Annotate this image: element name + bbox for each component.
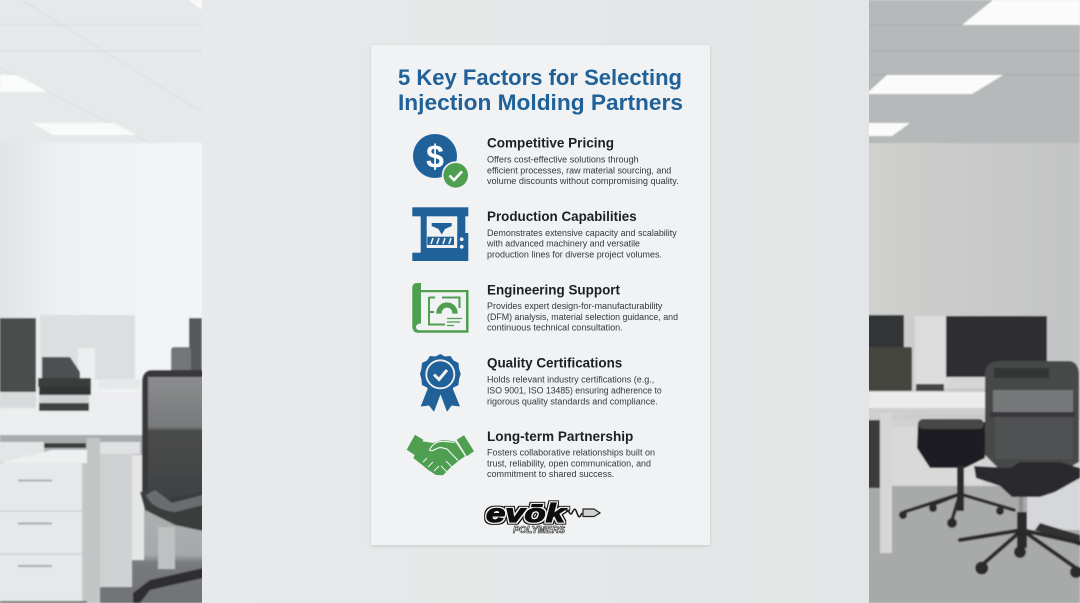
text: long-term partnership description: trust, reliability, open communication, and	[487, 458, 651, 469]
text: quality certifications description: ISO 9001, ISO 13485) ensuring adherence to	[487, 385, 662, 396]
logo: evok polymers: evōk	[486, 498, 567, 528]
heading: production capabilities: Production Capabilities	[487, 209, 637, 224]
left office background	[0, 0, 203, 603]
text: competitive pricing description: efficient processes, raw material sourcing, and	[487, 165, 671, 176]
icon: dollar with check	[413, 134, 470, 189]
text: production capabilities description: Demonstrates extensive capacity and scalability	[487, 228, 677, 239]
item: competitive pricing	[413, 134, 679, 189]
text: production capabilities description	[486, 228, 677, 260]
item: long-term partnership	[407, 429, 655, 480]
icon: blueprint	[412, 283, 468, 333]
text: long-term partnership description: Fosters collaborative relationships built on	[487, 448, 655, 459]
text: competitive pricing description: Offers cost-effective solutions through	[487, 155, 639, 166]
icon: injection press	[412, 207, 468, 261]
text: production capabilities description: with advanced machinery and versatile	[486, 239, 640, 250]
text: long-term partnership description: commitment to shared success.	[487, 469, 614, 480]
title: 5 Key Factors for Selecting	[398, 65, 682, 90]
text: quality certifications description: Holds relevant industry certifications (e.g.,	[487, 375, 654, 386]
text: engineering support description: (DFM) analysis, material selection guidance, and	[487, 312, 678, 323]
text: engineering support description	[487, 301, 678, 334]
text: production capabilities description: production lines for diverse project volumes.	[487, 249, 662, 260]
text: engineering support description: continuous technical consultation.	[487, 323, 623, 334]
heading: long-term partnership: Long-term Partnership	[487, 429, 633, 444]
icon: handshake	[407, 435, 474, 475]
text: quality certifications description: rigorous quality standards and compliance.	[487, 396, 658, 407]
icon: dollar with check: $	[426, 138, 444, 174]
right office background	[866, 0, 1080, 603]
item: production capabilities	[412, 207, 677, 261]
heading: engineering support: Engineering Support	[487, 282, 621, 297]
logo: evok polymers	[486, 498, 600, 536]
text: engineering support description: Provides expert design-for-manufacturability	[487, 301, 662, 312]
title	[398, 65, 683, 115]
logo: evok polymers: POLYMERS	[513, 525, 565, 536]
heading: quality certifications: Quality Certifications	[487, 356, 622, 371]
icon: award ribbon	[420, 354, 461, 412]
item: quality certifications	[420, 354, 662, 412]
text: quality certifications description	[487, 375, 662, 407]
text: long-term partnership description	[487, 448, 655, 480]
poster	[371, 45, 710, 545]
heading: competitive pricing: Competitive Pricing	[487, 136, 614, 151]
text: competitive pricing description	[487, 155, 679, 187]
text: competitive pricing description: volume discounts without compromising quality.	[487, 176, 679, 187]
poster board	[371, 45, 710, 545]
item: engineering support	[412, 282, 678, 334]
title: Injection Molding Partners	[398, 90, 683, 115]
center wall	[202, 0, 869, 603]
